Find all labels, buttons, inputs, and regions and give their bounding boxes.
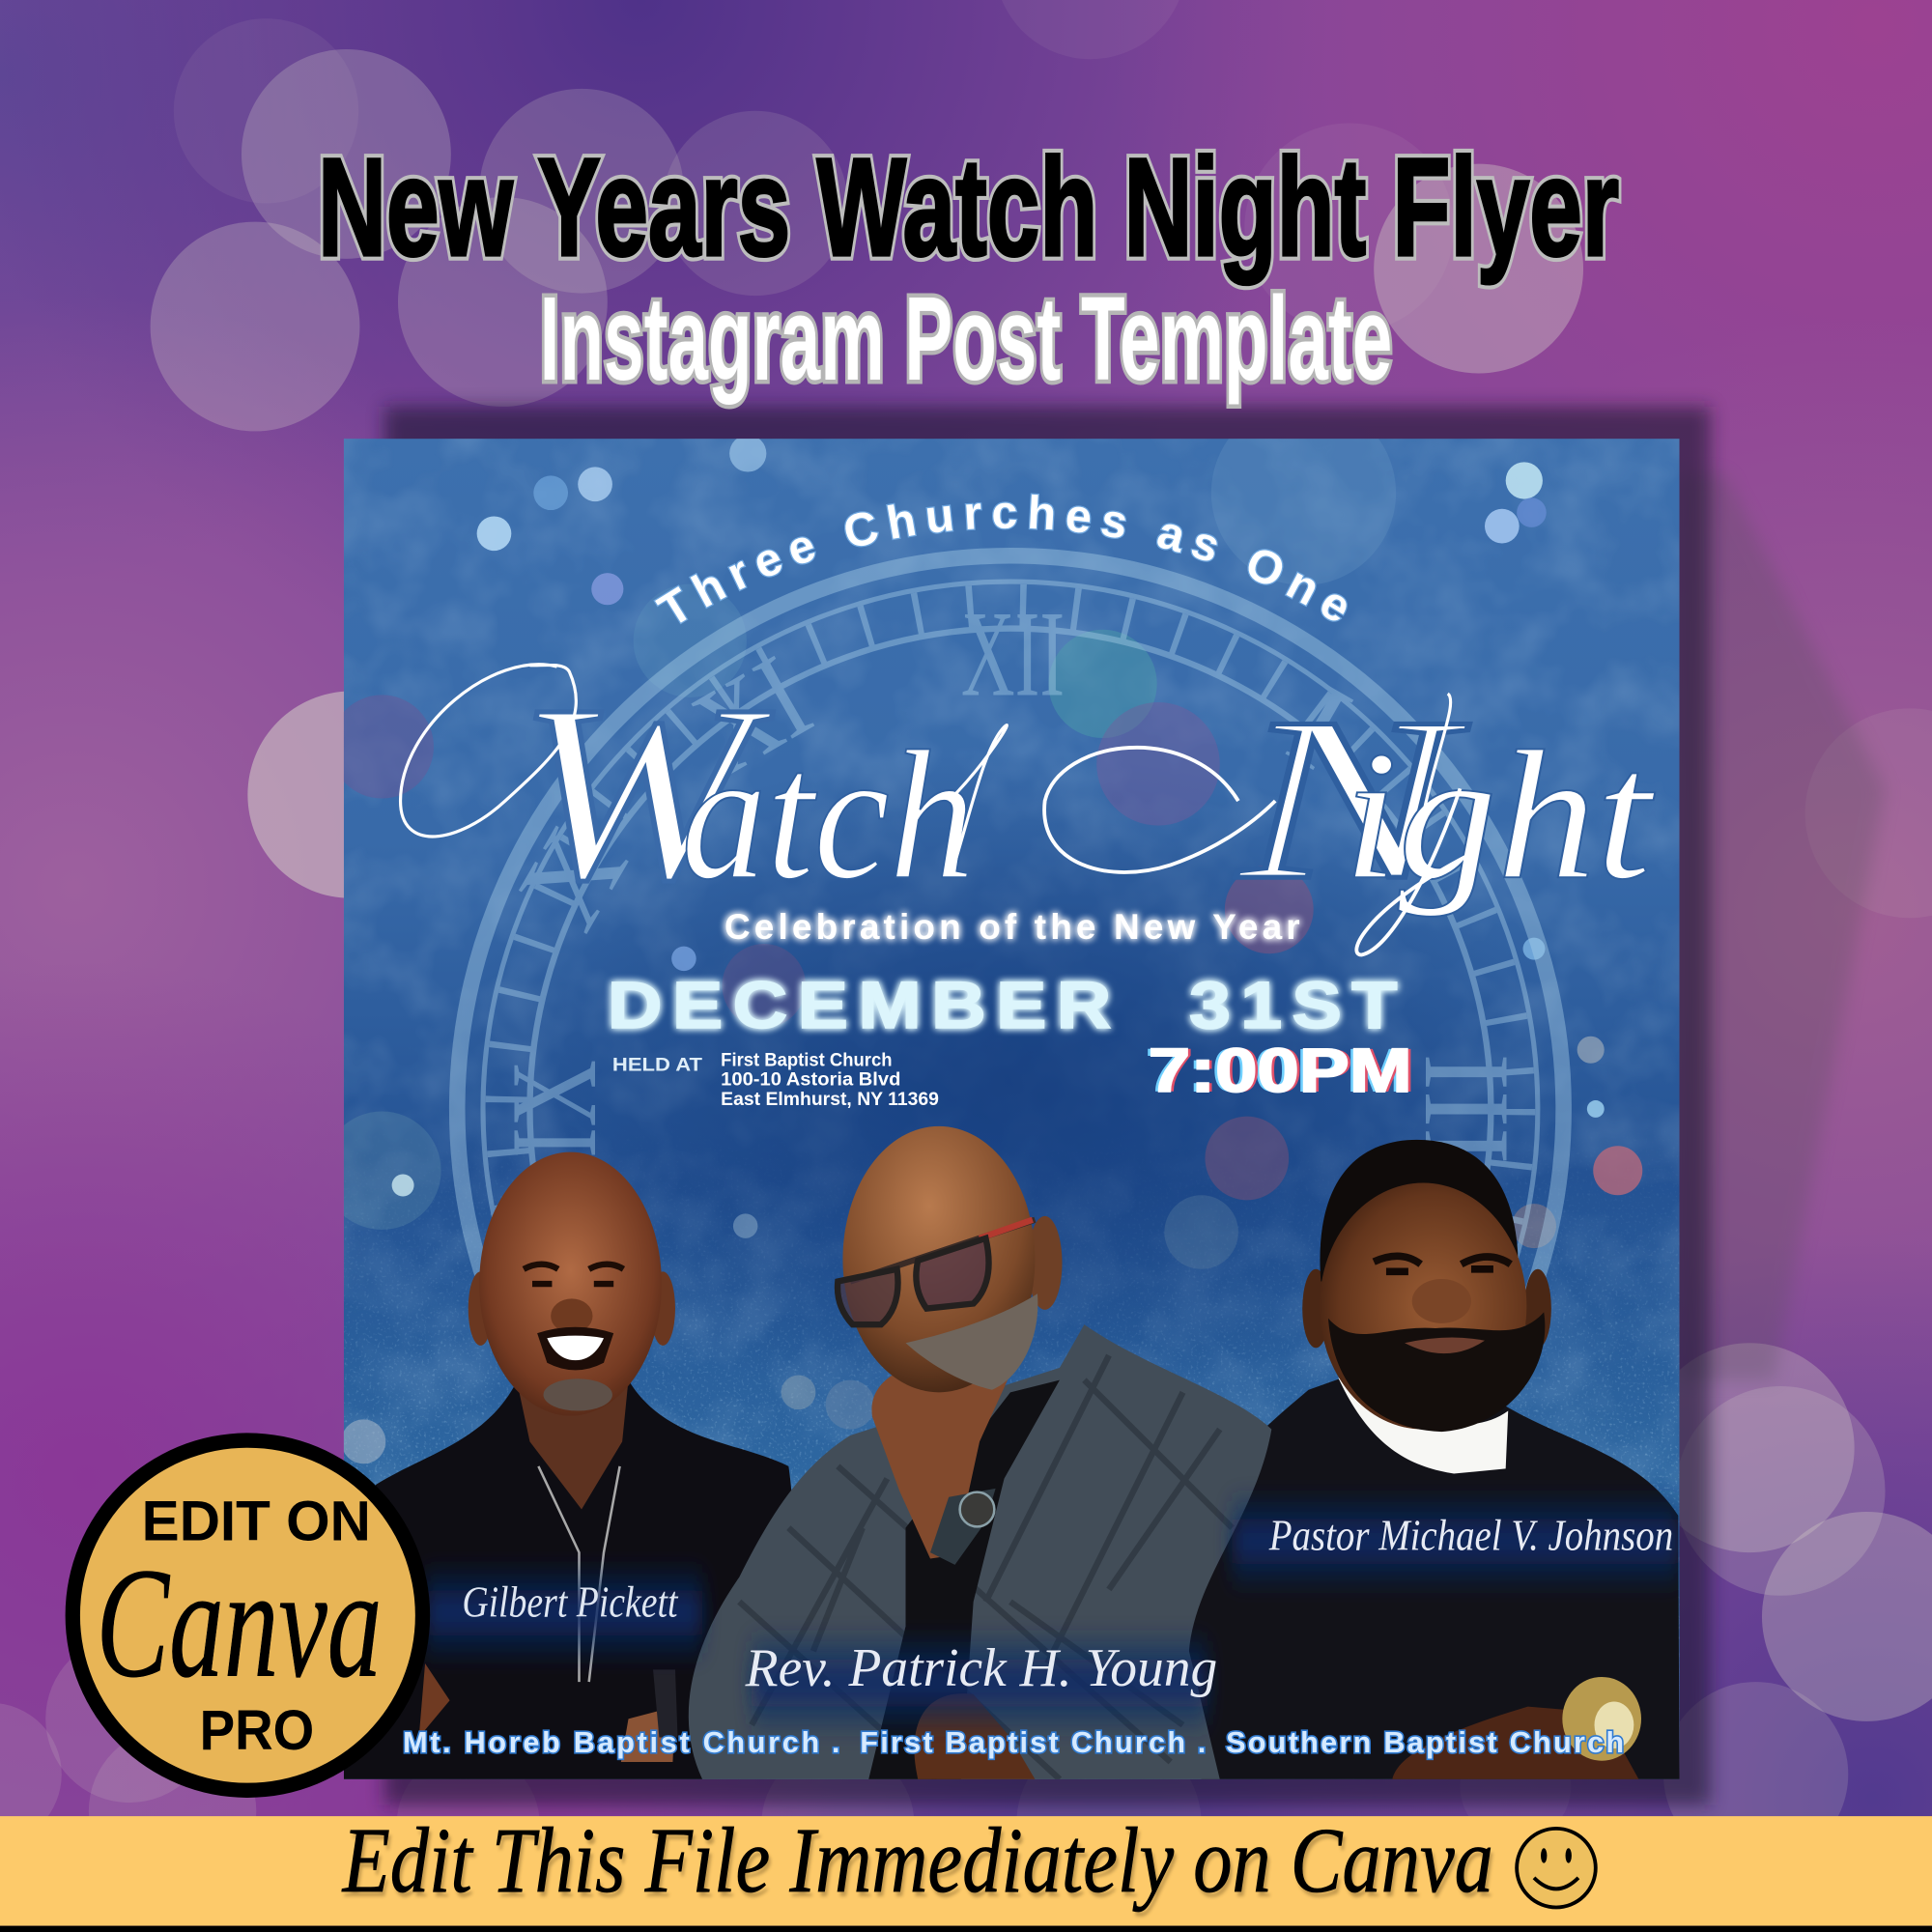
script title: Watch Night: atch bbox=[681, 714, 975, 918]
name: Patrick H. Young: Rev. Patrick H. Young bbox=[745, 1638, 1217, 1698]
name bands bbox=[425, 1488, 1680, 1740]
script title: Watch Night: ight bbox=[1343, 714, 1655, 918]
flyer drop shadow bbox=[384, 407, 1886, 1805]
icon: smiley bbox=[1517, 1829, 1596, 1907]
person: left speaker bbox=[344, 1152, 793, 1779]
clock face: IX bbox=[485, 1060, 622, 1158]
clock face bbox=[449, 548, 1572, 1325]
badge: edit on Canva Pro bbox=[66, 1433, 430, 1798]
date: December 31st bbox=[605, 974, 1404, 1036]
name: Gilbert Pickett: r. bbox=[407, 1577, 430, 1626]
badge: edit on Canva Pro: Canva bbox=[96, 1537, 382, 1711]
clock face: XII bbox=[961, 584, 1065, 722]
venue details: East Elmhurst, NY 11369 bbox=[721, 1090, 939, 1110]
church names line: . bbox=[832, 1726, 839, 1759]
event time: 7:00PM: 7:00PM bbox=[1149, 1036, 1412, 1105]
badge: edit on Canva Pro: PRO bbox=[200, 1699, 314, 1762]
name: Michael V. Johnson: Pastor Michael V. Johnson bbox=[1268, 1511, 1673, 1560]
church names line: Mt. Horeb Baptist Church bbox=[403, 1726, 819, 1759]
venue details: First Baptist Church bbox=[721, 1050, 892, 1070]
church names line bbox=[403, 1726, 1624, 1759]
person: middle speaker bbox=[689, 1126, 1271, 1779]
venue details bbox=[612, 1050, 939, 1110]
church names line: First Baptist Church bbox=[860, 1726, 1185, 1759]
clock face: X bbox=[490, 805, 653, 950]
venue details: 100-10 Astoria Blvd bbox=[721, 1070, 900, 1091]
clock face: XI bbox=[672, 629, 831, 800]
clock face: I bbox=[1268, 656, 1372, 796]
church names line: . bbox=[1198, 1726, 1206, 1759]
name: Gilbert Pickett: Gilbert Pickett bbox=[462, 1577, 679, 1626]
subtitle: Celebration of the New Year: Celebration of the New Year bbox=[724, 907, 1300, 947]
badge: edit on Canva Pro: EDIT ON bbox=[142, 1490, 371, 1552]
church names line: Southern Baptist Church bbox=[1226, 1726, 1624, 1759]
venue details: HELD AT bbox=[612, 1054, 702, 1075]
script title: Watch Night bbox=[401, 652, 1655, 955]
subtitle: Instagram Post Template bbox=[540, 272, 1392, 406]
event time: 7:00PM: 7:00PM bbox=[1152, 1036, 1416, 1105]
flyer bokeh lights bbox=[323, 401, 1642, 1463]
date: December 31st: DECEMBER bbox=[608, 968, 1122, 1042]
date: December 31st: 31ST bbox=[1189, 968, 1407, 1042]
flyer panel bbox=[344, 439, 1679, 1779]
script title: Watch Night: W bbox=[518, 652, 777, 932]
banner text: Edit This File Immediately on Canva bbox=[341, 1808, 1493, 1912]
script title: Watch Night: N bbox=[1236, 669, 1469, 928]
person: right speaker bbox=[1182, 1140, 1680, 1779]
event time: 7:00PM: 7:00PM bbox=[1145, 1036, 1408, 1105]
arched heading: Three Churches as One: Three Churches as One bbox=[653, 493, 1348, 624]
banner text shadow: Edit This File Immediately on Canva bbox=[343, 1813, 1495, 1917]
bottom banner bbox=[0, 1808, 1932, 1932]
name: Gilbert Pickett bbox=[407, 1577, 679, 1626]
flyer blue background bbox=[344, 439, 1680, 1779]
clock face: III bbox=[1399, 1054, 1536, 1164]
